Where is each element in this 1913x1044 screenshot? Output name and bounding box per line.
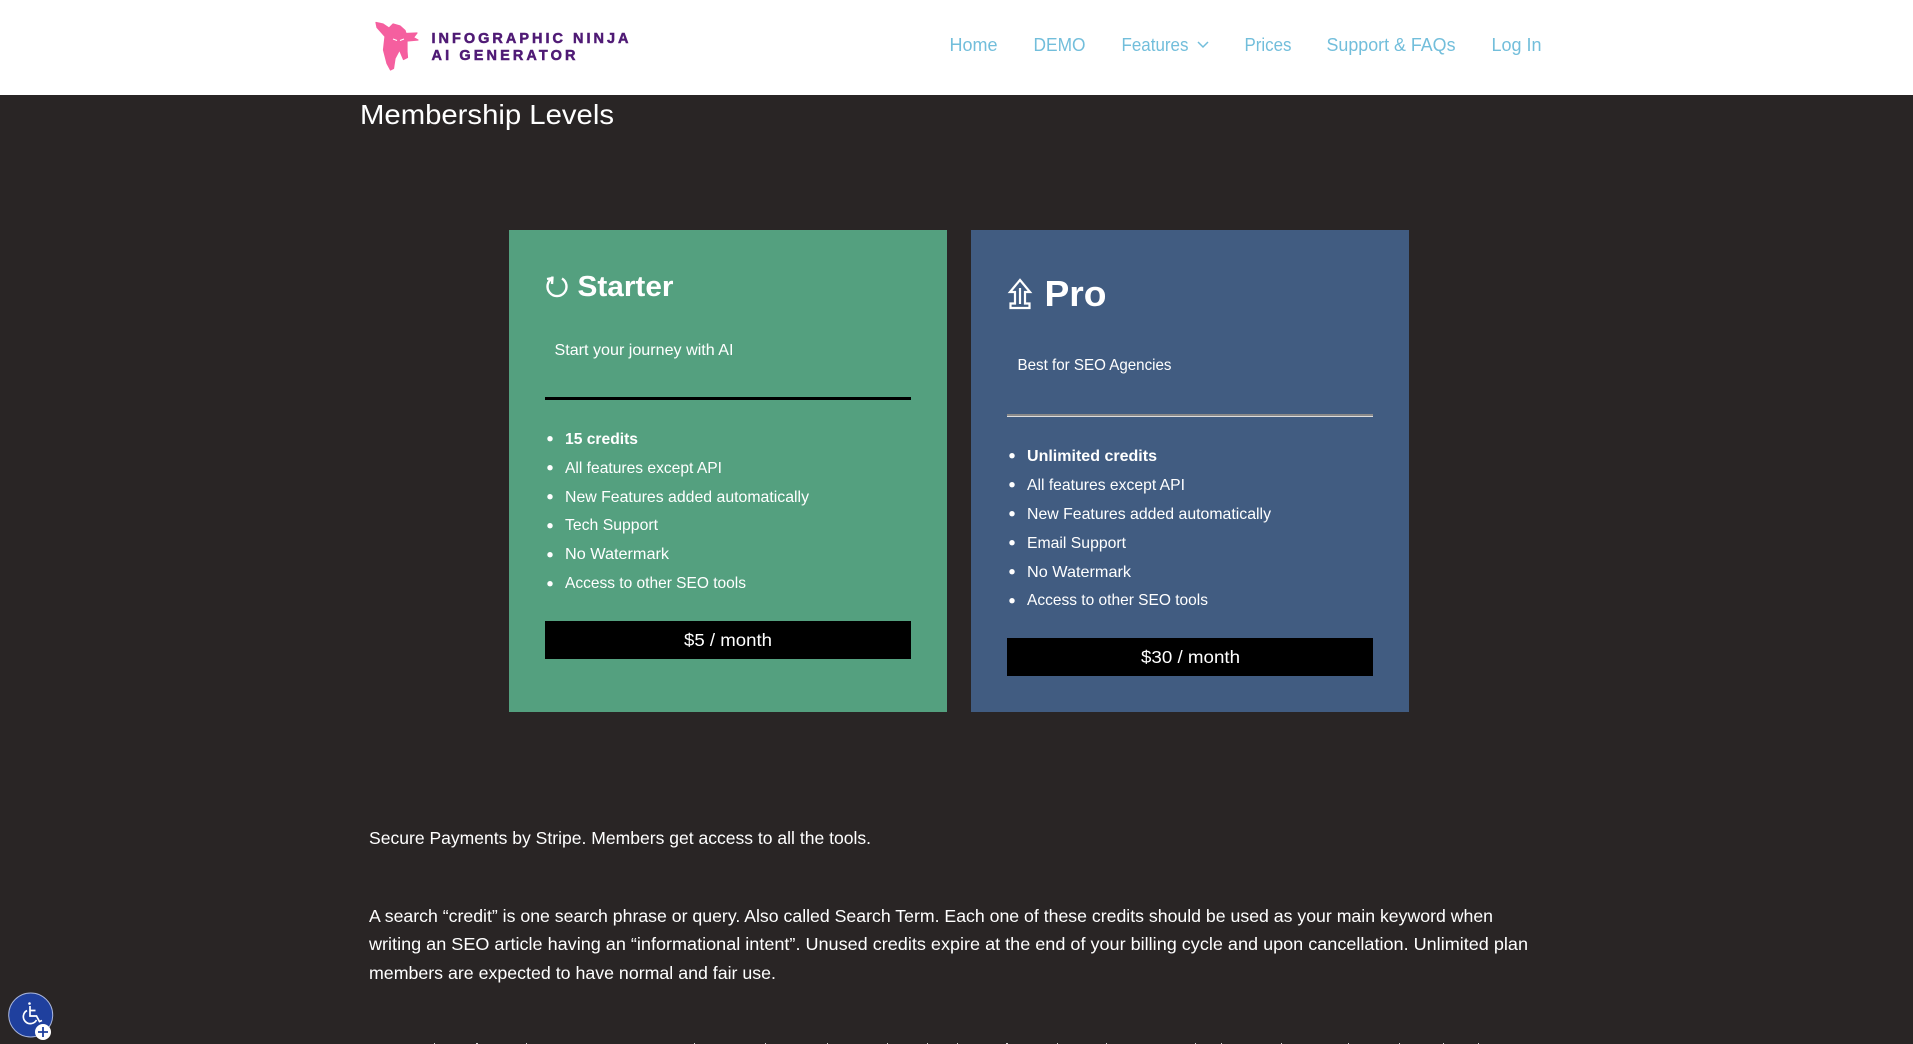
page title: Membership Levels (360, 99, 614, 130)
heading: Pro: Pro (1044, 273, 1106, 314)
nav: Log In: Log In (1492, 35, 1542, 55)
feature list: 15 credits (565, 431, 638, 448)
heading: Starter: Starter (578, 271, 674, 303)
nav: Support & FAQs: Support & FAQs (1326, 35, 1456, 55)
accessibility button (9, 993, 53, 1040)
text block: credit explanation: A search “credit” is one search phrase or query. Also called Search Term. Each one of these credits should be used as your main keyword when (369, 906, 1493, 926)
cut-off text line at page bottom (434, 1043, 1479, 1044)
icon: upward arrow (1010, 280, 1030, 308)
subtitle: Start your journey with AI (554, 342, 734, 359)
icon: clockwise arrow (547, 276, 566, 296)
divider (545, 397, 911, 400)
panel: Starter plan (509, 230, 947, 712)
price button: $30 / month (1141, 647, 1240, 667)
feature list (547, 431, 809, 592)
feature list (1009, 448, 1271, 609)
icon: pink ninja (376, 22, 418, 70)
text block: credit explanation (368, 906, 1528, 983)
feature list: No Watermark (1027, 564, 1132, 581)
nav: Features: Features (1122, 35, 1188, 55)
site header (0, 0, 1913, 95)
price button: $5 / month (684, 630, 772, 650)
feature list: New Features added automatically (565, 489, 809, 506)
icon: chevron (1198, 42, 1208, 47)
nav: Home: Home (950, 35, 998, 55)
feature list: No Watermark (565, 546, 670, 563)
icon: wheelchair (23, 1002, 42, 1024)
icon: plus badge (35, 1024, 51, 1040)
price button (1007, 638, 1373, 676)
logo text line 2: AI GENERATOR (432, 48, 576, 64)
feature list: Email Support (1027, 535, 1127, 552)
feature list: New Features added automatically (1027, 506, 1271, 523)
text block: credit explanation: writing an SEO article having an “informational intent”. Unused credits expire at the end of your billing cycle and upon cancellation. Unlimited plan (368, 934, 1528, 954)
feature list: Access to other SEO tools (565, 575, 746, 592)
feature list: Unlimited credits (1027, 448, 1157, 465)
logo (376, 22, 629, 70)
text block: payments note: Secure Payments by Stripe. Members get access to all the tools. (369, 828, 871, 848)
navigation (950, 35, 1542, 55)
panel: Pro plan (971, 230, 1409, 712)
feature list: All features except API (1027, 477, 1185, 494)
logo text line 1: INFOGRAPHIC NINJA (432, 31, 629, 47)
price button (545, 621, 911, 659)
feature list: Tech Support (565, 517, 659, 534)
nav: Prices: Prices (1244, 35, 1292, 55)
feature list: All features except API (565, 460, 722, 477)
nav: DEMO: DEMO (1034, 35, 1086, 55)
divider (1007, 414, 1373, 417)
feature list: Access to other SEO tools (1027, 592, 1208, 609)
text block: credit explanation: members are expected to have normal and fair use. (369, 963, 776, 983)
subtitle: Best for SEO Agencies (1018, 357, 1172, 374)
